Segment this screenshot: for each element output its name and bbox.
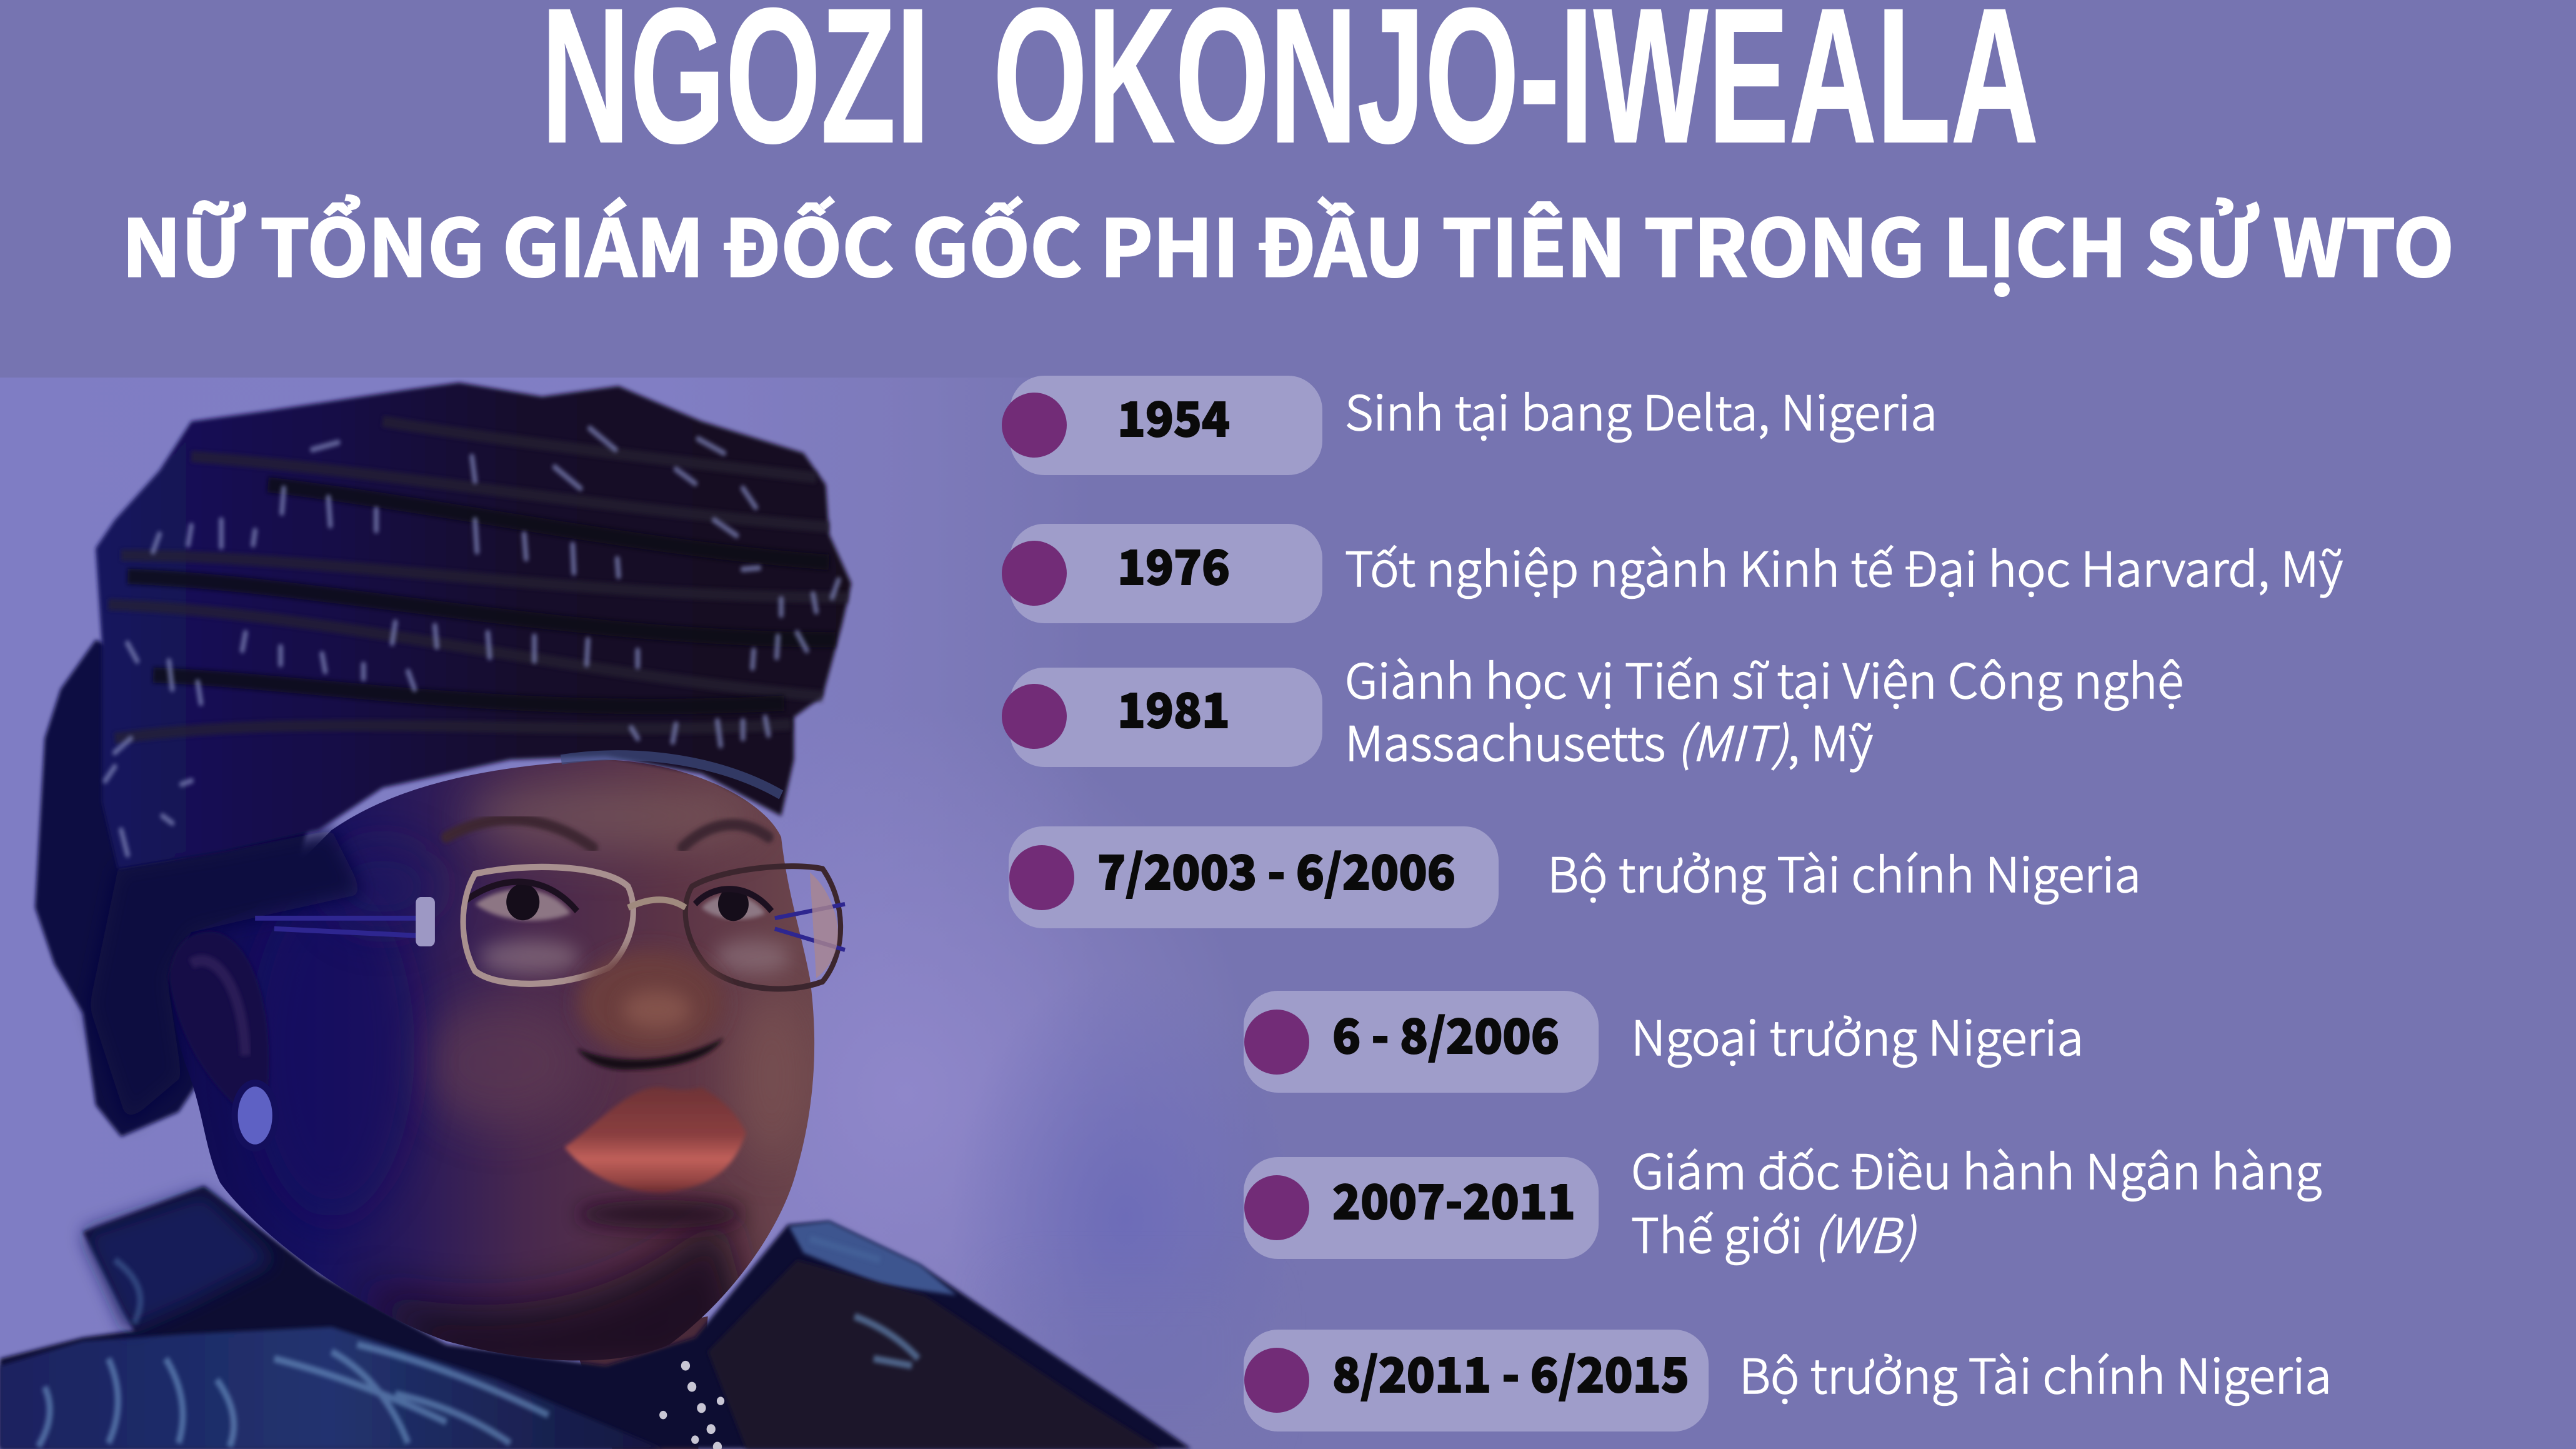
timeline 8/2011 - 6/2015 — [1244, 1330, 2332, 1431]
eyebrows — [446, 820, 769, 848]
timeline 2007-2011 — [1244, 1134, 2322, 1266]
face — [171, 760, 814, 1361]
ear and earring — [169, 932, 276, 1148]
scarf — [0, 1186, 1191, 1449]
back hair and wrap — [35, 640, 332, 1136]
pearl necklace — [659, 1361, 724, 1449]
timeline 2007-2011: Thế giới (WB) — [1631, 1198, 1917, 1266]
timeline 6 - 8/2006: Ngoại trưởng Nigeria — [1631, 1000, 2084, 1069]
timeline 1981 — [1002, 643, 2184, 775]
timeline 1976 — [1002, 524, 2343, 623]
face light and shadow — [249, 781, 810, 1387]
timeline 1981: 1981 — [1117, 673, 1230, 741]
timeline 2007-2011: Giám đốc Điều hành Ngân hàng — [1631, 1134, 2322, 1203]
dark hair beside the face — [89, 830, 364, 1123]
glasses — [255, 866, 845, 989]
title — [541, 0, 2039, 183]
timeline 1981: Massachusetts (MIT), Mỹ — [1345, 706, 1873, 775]
timeline 1976: 1976 — [1117, 529, 1230, 598]
nose — [577, 950, 724, 1070]
timeline 7/2003 - 6/2006: Bộ trưởng Tài chính Nigeria — [1547, 837, 2141, 906]
timeline 6 - 8/2006: 6 - 8/2006 — [1332, 998, 1559, 1067]
timeline 1954: 1954 — [1117, 381, 1230, 450]
neck — [574, 1316, 708, 1449]
photo backdrop — [0, 378, 1300, 1449]
hat — [96, 383, 851, 869]
lip shadow — [577, 1200, 743, 1228]
lips — [564, 1087, 746, 1193]
timeline 1954 — [1002, 375, 1937, 475]
eyes — [466, 882, 791, 974]
hat stitches — [105, 428, 839, 855]
timeline 6 - 8/2006 — [1244, 991, 2084, 1093]
timeline 7/2003 - 6/2006: 7/2003 - 6/2006 — [1097, 835, 1455, 903]
timeline 1954: Sinh tại bang Delta, Nigeria — [1345, 375, 1937, 444]
subtitle: NỮ TỔNG GIÁM ĐỐC GỐC PHI ĐẦU TIÊN TRONG LỊCH SỬ WTO — [122, 186, 2454, 299]
timeline 1981: Giành học vị Tiến sĩ tại Viện Công nghệ — [1345, 643, 2184, 712]
timeline 2007-2011: 2007-2011 — [1332, 1164, 1575, 1233]
timeline 8/2011 - 6/2015: 8/2011 - 6/2015 — [1332, 1337, 1689, 1406]
timeline 7/2003 - 6/2006 — [1009, 826, 2141, 928]
timeline 8/2011 - 6/2015: Bộ trưởng Tài chính Nigeria — [1739, 1338, 2332, 1407]
timeline 1976: Tốt nghiệp ngành Kinh tế Đại học Harvard, Mỹ — [1345, 531, 2343, 600]
portrait photo — [0, 383, 1191, 1449]
